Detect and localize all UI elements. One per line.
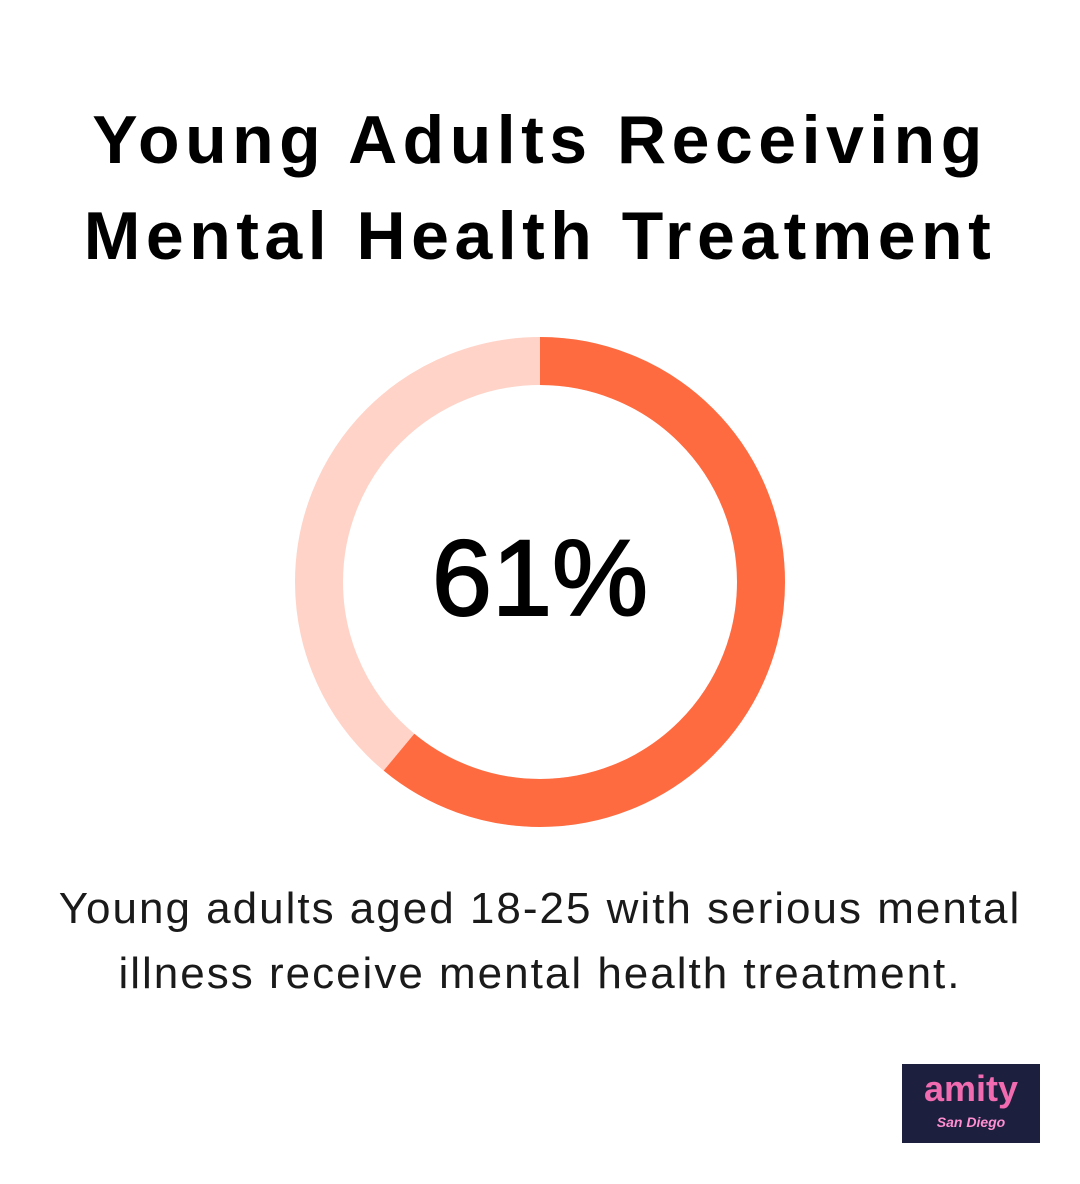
donut chart: 61% [432, 517, 648, 638]
title: Mental Health Treatment [84, 198, 996, 274]
title [84, 102, 996, 274]
logo: San Diego [937, 1114, 1005, 1130]
description [59, 884, 1021, 998]
title: Young Adults Receiving [92, 102, 988, 178]
logo: amity [924, 1068, 1018, 1109]
logo [902, 1064, 1040, 1143]
description: illness receive mental health treatment. [118, 949, 962, 998]
description: Young adults aged 18-25 with serious mental [59, 884, 1021, 933]
